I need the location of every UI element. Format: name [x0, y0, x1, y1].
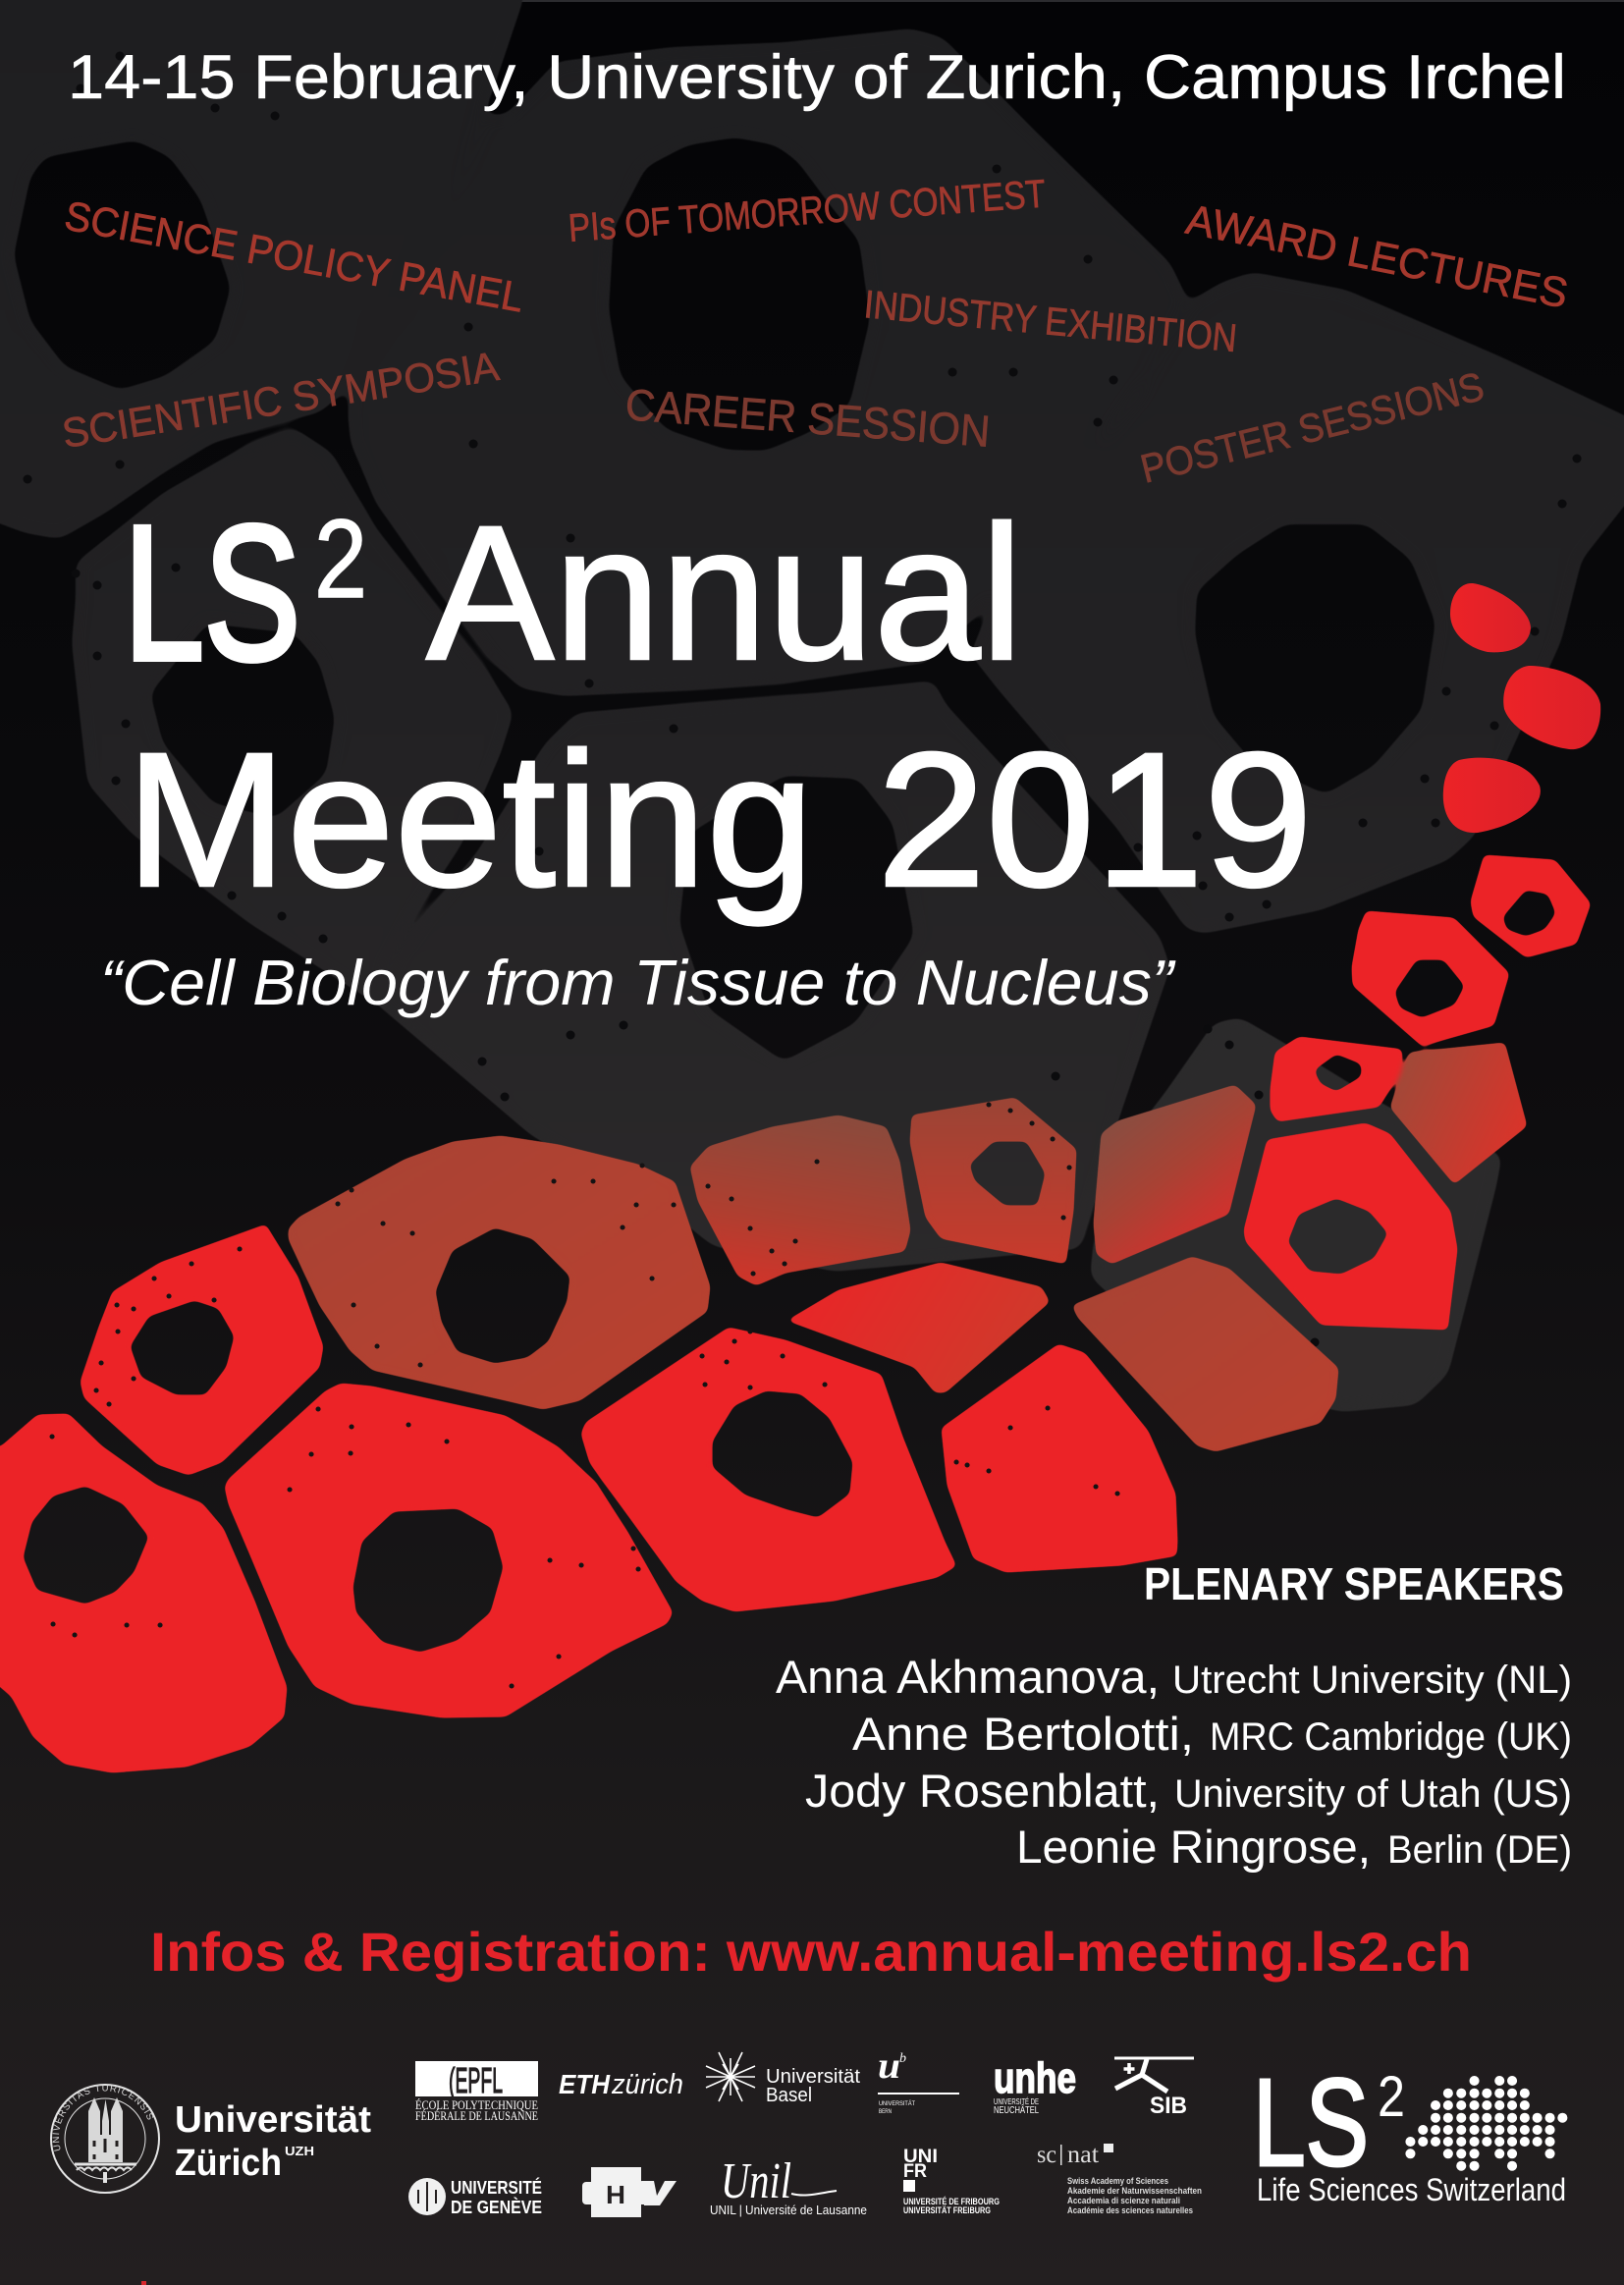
- item: PIs of tomorrow contest: PIs OF TOMORROW CONTEST: [567, 172, 1047, 250]
- cell: pentagon faded: [1389, 1042, 1528, 1185]
- logo: Universität Zürich: [50, 2084, 371, 2194]
- logo: Université de Neuchâtel: [994, 2054, 1076, 2116]
- logo: Université de Genève: UNIVERSITÉ: [451, 2177, 542, 2198]
- cell: small centre red: [785, 1262, 1051, 1393]
- speaker 2: MRC Cambridge (UK): [1210, 1715, 1572, 1759]
- speaker 4: Leonie Ringrose,: [1016, 1821, 1371, 1873]
- plenary speakers: [776, 1558, 1572, 1873]
- logo: ETH Zürich: [559, 2069, 683, 2100]
- logo: Universität Bern: BERN: [879, 2108, 892, 2115]
- logo: Université de Fribourg: FR: [903, 2161, 927, 2182]
- blob 3: [1443, 758, 1541, 833]
- cell: lower right: [1090, 1017, 1502, 1412]
- logo: LS2 Life Sciences Switzerland: 2: [1378, 2065, 1405, 2129]
- UZH wordmark: Universität: [175, 2099, 371, 2141]
- item: award lectures: AWARD LECTURES: [1182, 196, 1572, 318]
- logo: Université de Genève: [408, 2177, 542, 2217]
- cell: top centre with nucleus: [348, 28, 1188, 696]
- cell: top small red with nucleus: [1470, 854, 1592, 958]
- cell: right lower red: [941, 1343, 1178, 1573]
- logo: CHUV: H: [606, 2180, 625, 2209]
- logo: ETH Zürich: zürich: [611, 2069, 683, 2100]
- logo: sc|nat: Accademia di scienze naturali: [1067, 2196, 1180, 2206]
- logo: EPFL: [415, 2060, 538, 2123]
- cell: centre red with nucleus: [580, 1327, 957, 1612]
- logo: sc|nat: nat: [1067, 2142, 1099, 2168]
- main title: 2: [314, 497, 367, 621]
- main title: 2019: [877, 713, 1313, 927]
- logo: Université de Fribourg: UNI: [903, 2147, 938, 2167]
- subtitle: “Cell Biology from Tissue to Nucleus”: [100, 947, 1176, 1018]
- cell: upper left red: [80, 1224, 324, 1476]
- logo: Universität Bern: b: [899, 2051, 906, 2066]
- logo: UNIL: UNIL | Université de Lausanne: [710, 2203, 867, 2217]
- logo: EPFL: ÉCOLE POLYTECHNIQUE: [415, 2097, 538, 2112]
- floating programme items: [59, 172, 1572, 492]
- logo: sc|nat: Académie des sciences naturelles: [1067, 2205, 1193, 2216]
- logo: SIB: SIB: [1150, 2093, 1187, 2119]
- main title: Annual: [426, 486, 1023, 700]
- logo: Université de Fribourg: UNIVERSITÄT FREIBURG: [903, 2205, 991, 2215]
- logo: Université de Neuchâtel: UNIVERSITÉ DE: [994, 2096, 1039, 2106]
- logo: UNIL: Unil: [721, 2153, 791, 2209]
- logo: Université de Neuchâtel: unhe: [994, 2054, 1076, 2102]
- logo: Universität Basel: Universität: [766, 2066, 860, 2088]
- main title: Meeting: [126, 713, 814, 927]
- logo: SIB: [1114, 2058, 1194, 2119]
- cell: faded with nucleus: [909, 1097, 1077, 1265]
- logo: CHUV: [582, 2167, 677, 2217]
- logo: ETH Zürich: ETH: [559, 2069, 611, 2099]
- date and venue: 14-15 February, University of Zurich, Campus Irchel: [68, 43, 1566, 112]
- logo: Universität Bern: UNIVERSITÄT: [879, 2099, 915, 2107]
- cell: bottom left red: [0, 1413, 288, 1773]
- cell: bottom centre red: [224, 1383, 674, 1718]
- item: career session: CAREER SESSION: [623, 379, 992, 457]
- speaker 3: University of Utah (US): [1174, 1772, 1572, 1816]
- speaker 1: Utrecht University (NL): [1172, 1659, 1572, 1702]
- logo: UNIL: [710, 2153, 867, 2217]
- logo: Universität Zürich: UZH: [285, 2144, 314, 2158]
- cell: middle centre with nucleus: [376, 680, 1170, 1272]
- logo: Université de Neuchâtel: NEUCHÂTEL: [994, 2103, 1039, 2116]
- tiny red print mark: [141, 2281, 146, 2285]
- logo: Université de Fribourg: [903, 2147, 1000, 2215]
- logo: Universität Basel: [706, 2052, 860, 2106]
- item: scientific symposia: SCIENTIFIC SYMPOSIA: [59, 343, 502, 457]
- cell: large brown top: [288, 1135, 711, 1410]
- speaker 1: Anna Akhmanova,: [776, 1651, 1160, 1703]
- speaker 4: [1016, 1821, 1572, 1873]
- main title: [124, 486, 1313, 927]
- speakers heading: PLENARY SPEAKERS: [1144, 1558, 1564, 1609]
- logo: LS2 Life Sciences Switzerland: Life Sciences Switzerland: [1257, 2172, 1566, 2207]
- faded background cells: [0, 0, 1624, 1412]
- cell: upper right with nucleus: [970, 272, 1624, 934]
- speaker 1: [776, 1651, 1572, 1703]
- red and faded cell sheet: [0, 854, 1592, 1773]
- logo: LS2 Life Sciences Switzerland: LS: [1253, 2053, 1369, 2192]
- logo: Universität Basel: Basel: [766, 2085, 812, 2106]
- logo: Université de Genève: DE GENÈVE: [451, 2197, 542, 2217]
- logo: EPFL: (EPFL: [449, 2060, 503, 2100]
- item: science policy panel: SCIENCE POLICY PANEL: [61, 192, 527, 321]
- logo: Université de Fribourg: UNIVERSITÉ DE FRIBOURG: [903, 2197, 1000, 2206]
- cell: top left with nucleus: [0, 0, 523, 539]
- cell: right red with nucleus: [1243, 1122, 1458, 1331]
- speaker 2: Anne Bertolotti,: [852, 1708, 1194, 1760]
- cell: faded top centre: [689, 1115, 911, 1286]
- item: poster sessions: POSTER SESSIONS: [1136, 363, 1489, 492]
- cell: faded rounded quad: [1093, 1084, 1257, 1265]
- dotted Switzerland map: [1410, 2081, 1562, 2166]
- UZH seal: [50, 2084, 160, 2194]
- registration link: Infos & Registration: www.annual-meeting.ls2.ch: [150, 1921, 1472, 1983]
- logo: Universität Bern: [878, 2045, 959, 2115]
- logo: EPFL: FÉDÉRALE DE LAUSANNE: [415, 2108, 538, 2123]
- logo: sc|nat: sc: [1037, 2142, 1056, 2168]
- cell: small red with nucleus: [1270, 1036, 1403, 1122]
- cell: upper red with nucleus: [1351, 910, 1510, 1047]
- blob 1: [1450, 583, 1531, 652]
- logo: Universität Bern: u: [878, 2045, 900, 2087]
- specks in red cells: [52, 1105, 1117, 1686]
- item: industry exhibition: INDUSTRY EXHIBITION: [862, 283, 1239, 360]
- specks in background cells: [27, 56, 1577, 1342]
- main title: LS: [124, 486, 300, 700]
- logo: Universität Zürich: Zürich: [175, 2143, 282, 2184]
- speaker 2: [852, 1708, 1572, 1760]
- logo: LS2 Life Sciences Switzerland: [1253, 2053, 1566, 2207]
- logo: sc|nat: Akademie der Naturwissenschaften: [1067, 2186, 1202, 2197]
- cell: faded lower quad: [1071, 1256, 1339, 1452]
- logo: sc|nat: [1037, 2142, 1202, 2216]
- blob 2: [1503, 666, 1600, 749]
- speaker 3: Jody Rosenblatt,: [805, 1765, 1160, 1817]
- speaker 4: Berlin (DE): [1387, 1828, 1572, 1872]
- cell: middle left with nucleus: [72, 428, 514, 1004]
- UZH seal: UNIVERSITAS TURICENSIS: [53, 2085, 153, 2151]
- speaker 3: [805, 1765, 1572, 1817]
- logo: sc|nat: Swiss Academy of Sciences: [1067, 2176, 1168, 2187]
